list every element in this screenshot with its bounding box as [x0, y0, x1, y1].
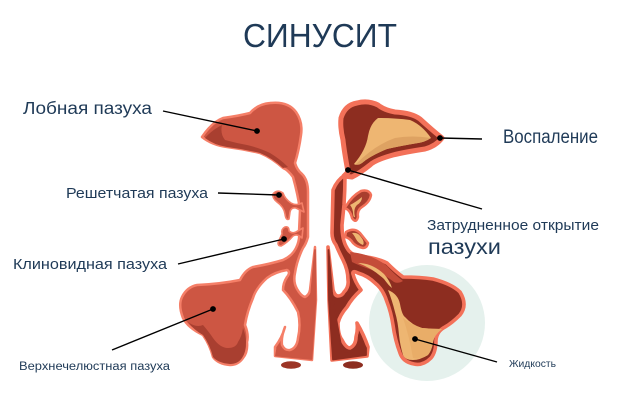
label: fluid: Жидкость	[509, 359, 556, 370]
left healthy sinuses	[180, 103, 316, 369]
label: sinus opening second line: пазухи	[428, 236, 501, 259]
right sphenoid sinus	[345, 230, 368, 248]
highlight circle: fluid	[369, 265, 485, 381]
label: sphenoid sinus: Клиновидная пазуха	[13, 256, 168, 273]
label: frontal sinus: Лобная пазуха	[23, 98, 152, 118]
label: obstructed opening: Затрудненное открытие	[427, 218, 599, 234]
label: maxillary sinus: Верхнечелюстная пазуха	[19, 361, 171, 373]
left maxillary sinus shadow	[188, 322, 246, 364]
right sinus system outline	[328, 175, 464, 364]
right inflamed sinuses	[328, 102, 464, 369]
left nasal wall and base	[276, 250, 316, 359]
left nostril	[281, 361, 301, 369]
right nasal wall and base	[328, 250, 366, 360]
pointer dots	[210, 128, 443, 342]
left sphenoid sinus	[278, 227, 303, 246]
left ethmoid sinus	[273, 191, 304, 219]
label: ethmoid sinus: Решетчатая пазуха	[66, 185, 209, 202]
right maxillary red band	[350, 252, 403, 283]
right ethmoid sinus	[344, 190, 371, 221]
right frontal sinus	[341, 102, 442, 177]
right nostril	[343, 361, 363, 369]
left frontal sinus shadow	[205, 125, 288, 168]
right maxillary fluid	[388, 290, 442, 360]
title: СИНУСИТ	[243, 17, 397, 54]
left sinus system outline	[180, 103, 316, 365]
pointer lines	[112, 111, 497, 362]
label: inflammation: Воспаление	[503, 127, 598, 148]
right sinus stripe of fluid	[358, 263, 392, 288]
